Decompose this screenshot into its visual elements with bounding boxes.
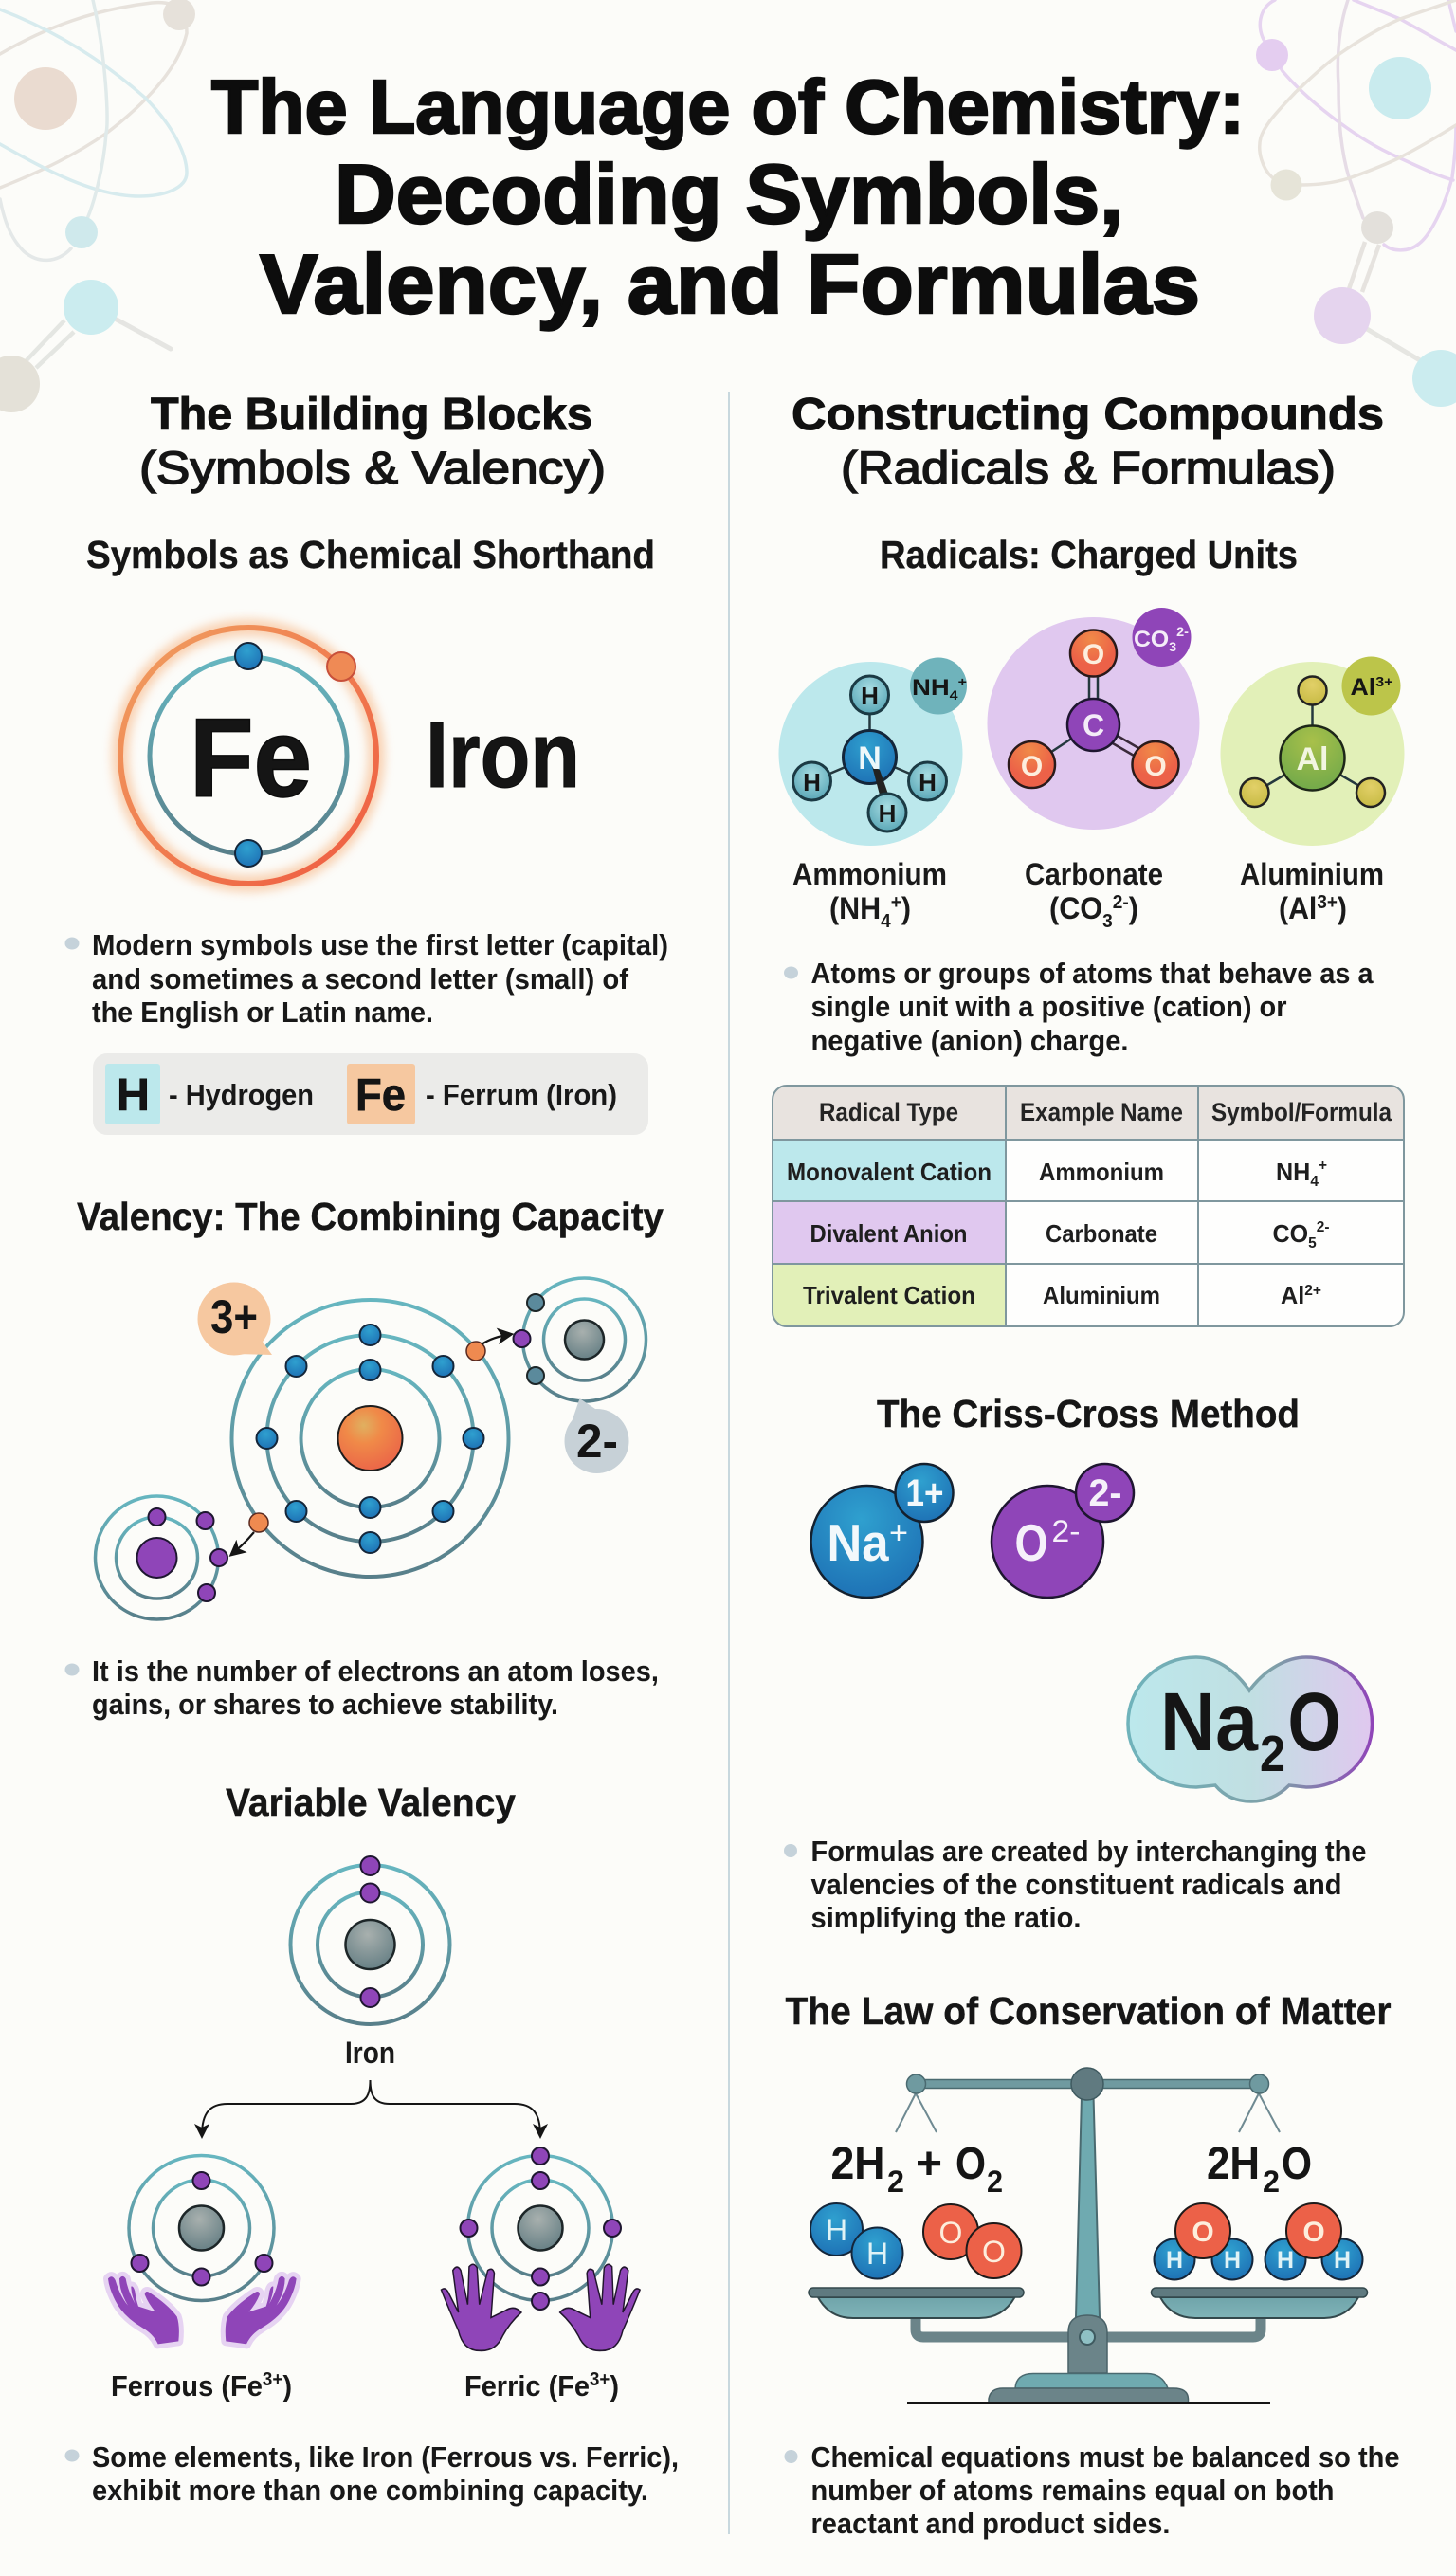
- equation: reactants: 2: [887, 2165, 904, 2199]
- icon: aluminium ion: Al: [1350, 674, 1374, 701]
- icon: oxygen molecule: O: [982, 2235, 1006, 2269]
- bullet: valency definition: gains, or shares to achieve stability.: [92, 1688, 558, 1721]
- icon: water molecule two: [1265, 2203, 1363, 2279]
- icon: Na2O compound: Na: [1160, 1676, 1259, 1768]
- heading: variable valency: Variable Valency: [226, 1781, 516, 1824]
- title: [211, 64, 1245, 331]
- badge: 2-: [565, 1398, 629, 1473]
- heading: radicals: Radicals: Charged Units: [880, 533, 1298, 576]
- left column heading: [139, 390, 606, 494]
- table: radical types: Aluminium: [1043, 1281, 1160, 1309]
- bullet: valency definition: It is the number of electrons an atom loses,: [92, 1654, 659, 1688]
- icon: oxide ion: 2-: [1052, 1514, 1081, 1548]
- bullet: balanced equations: number of atoms remains equal on both: [811, 2474, 1335, 2507]
- table: radical types: 5: [1308, 1235, 1317, 1251]
- equation: product: 2: [1263, 2165, 1280, 2199]
- left column heading: The Building Blocks: [151, 390, 592, 440]
- bullet: modern symbols: [64, 928, 668, 1029]
- bullet: formulas: simplifying the ratio.: [811, 1901, 1081, 1934]
- right pan: [1151, 2288, 1367, 2318]
- diagram: balance scale: [809, 2068, 1367, 2403]
- arrow: branching to ferrous and ferric: [202, 2080, 540, 2135]
- bullet: valency definition: [64, 1654, 659, 1721]
- bullet: formulas: Formulas are created by interchanging the: [811, 1835, 1367, 1868]
- icon: ammonium molecule: NH: [912, 675, 945, 701]
- table: radical types: 2-: [1317, 1219, 1329, 1235]
- equation: product: [1207, 2139, 1312, 2199]
- labels: radical names: 3+: [1317, 892, 1338, 913]
- icon: sodium ion: Na: [827, 1513, 889, 1572]
- table: radical types: Al: [1281, 1281, 1305, 1309]
- icon: aluminium ion: Al: [1297, 741, 1329, 777]
- equation: product: O: [1282, 2139, 1312, 2189]
- label: ferric: Ferric (Fe: [464, 2369, 598, 2402]
- table: radical types: CO: [1272, 1219, 1310, 1248]
- icon: sodium ion: +: [889, 1515, 908, 1551]
- labels: radical names: ): [1129, 891, 1138, 925]
- symbol key: hydrogen and ferrum: - Hydrogen: [169, 1078, 314, 1111]
- labels: radical names: [792, 857, 1384, 932]
- equation: reactants: 2H: [830, 2139, 885, 2189]
- icon: ammonium molecule: H: [919, 768, 937, 796]
- bullet: radicals definition: [784, 957, 1374, 1057]
- diagram: ferrous atom: [129, 2156, 274, 2300]
- right column heading: (Radicals & Formulas): [841, 444, 1336, 494]
- bullet: variable valency: Some elements, like Iron (Ferrous vs. Ferric),: [92, 2440, 679, 2474]
- icon: ammonium molecule: H: [861, 682, 879, 710]
- icon: Fe atom: [120, 628, 376, 884]
- icon: oxide ion: 2-: [1088, 1472, 1122, 1514]
- table: radical types: Radical Type: [819, 1098, 958, 1126]
- icon: ammonium molecule: H: [879, 799, 896, 828]
- heading: valency: Valency: The Combining Capacity: [77, 1195, 664, 1238]
- table: radical types: Monovalent Cation: [787, 1158, 992, 1186]
- left pan: [809, 2288, 1024, 2318]
- bullet: radicals definition: negative (anion) charge.: [811, 1024, 1128, 1057]
- icon: water molecule one: H: [1166, 2247, 1183, 2274]
- table: radical types: Divalent Anion: [810, 1219, 967, 1248]
- labels: radical names: (Al: [1279, 891, 1320, 925]
- icon: hydrogen molecule: H: [826, 2213, 847, 2247]
- icon: water molecule two: H: [1277, 2247, 1294, 2274]
- bullet: modern symbols: and sometimes a second letter (small) of: [92, 962, 629, 996]
- symbol key: hydrogen and ferrum: H: [117, 1070, 150, 1121]
- table: radical types: Example Name: [1020, 1098, 1183, 1126]
- icon: ammonium molecule: N: [858, 740, 882, 776]
- bullet: modern symbols: the English or Latin name.: [92, 996, 433, 1029]
- icon: carbonate molecule: 2-: [1176, 624, 1189, 639]
- equation: reactants: 2: [987, 2165, 1003, 2199]
- icon: carbonate molecule: 3: [1169, 639, 1176, 654]
- bullet: variable valency: exhibit more than one combining capacity.: [92, 2474, 648, 2507]
- icon: water molecule two: H: [1334, 2247, 1351, 2274]
- icon: ammonium molecule: +: [958, 674, 967, 689]
- icon: Fe atom: Fe: [190, 696, 312, 821]
- icon: oxygen molecule: O: [939, 2216, 962, 2250]
- table: radical types: 2+: [1304, 1283, 1321, 1299]
- bullet: balanced equations: [785, 2440, 1399, 2540]
- equation: reactants: O: [956, 2139, 986, 2189]
- symbol key: hydrogen and ferrum: Fe: [355, 1070, 406, 1121]
- symbol key: hydrogen and ferrum: [93, 1053, 648, 1135]
- heading: symbols as chemical shorthand: Symbols as Chemical Shorthand: [86, 533, 655, 576]
- bullet: modern symbols: Modern symbols use the first letter (capital): [92, 928, 668, 961]
- table: radical types: NH: [1276, 1158, 1312, 1186]
- icon: oxide ion: O: [1014, 1513, 1048, 1572]
- icon: water molecule one: O: [1192, 2217, 1214, 2248]
- labels: radical names: Aluminium: [1240, 857, 1384, 891]
- icon: Na2O compound: 2: [1260, 1726, 1285, 1782]
- table: radical types: +: [1319, 1158, 1327, 1174]
- right column heading: Constructing Compounds: [792, 390, 1384, 440]
- equation: reactants: +: [916, 2139, 942, 2189]
- labels: radical names: 4: [881, 911, 892, 932]
- equation: reactants: [830, 2139, 1003, 2199]
- table: radical types: [773, 1086, 1404, 1326]
- symbol key: hydrogen and ferrum: - Ferrum (Iron): [426, 1078, 617, 1111]
- diagram: ferric atom: [461, 2147, 621, 2310]
- table: radical types: Ammonium: [1039, 1158, 1164, 1186]
- badge: 2-: 2-: [576, 1415, 618, 1468]
- icon: oxide ion: [992, 1464, 1134, 1598]
- table: radical types: 4: [1310, 1174, 1319, 1190]
- table: radical types: Symbol/Formula: [1211, 1098, 1392, 1126]
- labels: radical names: ): [1338, 891, 1347, 925]
- labels: radical names: (NH: [829, 891, 883, 925]
- diagram: iron atom: [290, 1856, 449, 2024]
- left column heading: (Symbols & Valency): [139, 444, 606, 494]
- label: ferrous: Ferrous (Fe: [111, 2369, 273, 2402]
- badge: 3+: 3+: [210, 1290, 258, 1343]
- icon: ammonium molecule: [779, 658, 967, 846]
- labels: radical names: ): [901, 891, 911, 925]
- right column heading: [792, 390, 1384, 494]
- label: ferric: 3+: [590, 2369, 610, 2390]
- panel: left column, the building blocks: [64, 390, 679, 2507]
- icon: carbonate molecule: O: [1083, 639, 1104, 670]
- bullet: radicals definition: Atoms or groups of atoms that behave as a: [811, 957, 1374, 990]
- labels: radical names: 2-: [1113, 892, 1129, 913]
- table: radical types: Trivalent Cation: [803, 1281, 975, 1309]
- label: Iron: Iron: [426, 703, 580, 807]
- icon: aluminium ion: [1221, 656, 1405, 846]
- arrow: electron to top right atom: [482, 1335, 510, 1344]
- icon: carbonate molecule: O: [1021, 751, 1043, 782]
- bullet: formulas: [784, 1835, 1367, 1934]
- icon: hydrogen molecule: H: [866, 2237, 888, 2271]
- labels: radical names: +: [891, 892, 901, 913]
- icon: sodium ion: [811, 1464, 954, 1598]
- title: Decoding Symbols,: [335, 147, 1123, 241]
- bottom left atom: [95, 1496, 228, 1619]
- arrow: electron to bottom left atom: [232, 1532, 254, 1554]
- label: Iron: Iron: [345, 2036, 395, 2070]
- icon: carbonate molecule: [988, 608, 1200, 830]
- decorative atoms: top right: [1256, 0, 1456, 407]
- equation: product: 2H: [1207, 2139, 1260, 2189]
- bullet: variable valency: [64, 2440, 679, 2507]
- icon: sodium ion: 1+: [906, 1472, 944, 1514]
- diagram: electron transfer between atoms: [95, 1278, 646, 1619]
- title: The Language of Chemistry:: [211, 64, 1245, 149]
- icon: cupped hands: [108, 2276, 297, 2344]
- bullet: balanced equations: Chemical equations must be balanced so the: [811, 2440, 1399, 2474]
- label: ferrous: ): [282, 2369, 292, 2402]
- central atom: [231, 1300, 508, 1577]
- icon: carbonate molecule: CO: [1134, 627, 1168, 652]
- panel: right column, constructing compounds: [773, 390, 1405, 2540]
- column divider: [728, 392, 730, 2534]
- icon: carbonate molecule: C: [1083, 708, 1104, 742]
- title: Valency, and Formulas: [260, 237, 1200, 331]
- badge: 3+: [197, 1282, 272, 1356]
- top right atom: [514, 1278, 646, 1401]
- icon: ammonium molecule: H: [803, 768, 821, 796]
- icon: water molecule two: O: [1302, 2217, 1325, 2248]
- table: radical types: Carbonate: [1046, 1219, 1157, 1248]
- labels: radical names: (CO: [1049, 891, 1105, 925]
- icon: water molecule one: H: [1224, 2247, 1241, 2274]
- decorative atoms: top left: [0, 0, 195, 412]
- label: ferric: ): [610, 2369, 619, 2402]
- heading: law of conservation: The Law of Conservation of Matter: [785, 1989, 1392, 2033]
- icon: Na2O compound: O: [1287, 1676, 1340, 1768]
- labels: radical names: Ammonium: [792, 857, 947, 891]
- bullet: formulas: valencies of the constituent radicals and: [811, 1868, 1342, 1901]
- icon: Na2O compound: [1128, 1657, 1373, 1801]
- icon: oxygen molecule: [923, 2204, 1022, 2278]
- bullet: balanced equations: reactant and product sides.: [811, 2507, 1170, 2540]
- icon: ammonium molecule: 4: [950, 687, 958, 703]
- bullet: radicals definition: single unit with a positive (cation) or: [811, 990, 1287, 1023]
- label: ferrous: 3+: [263, 2369, 282, 2390]
- heading: criss-cross method: The Criss-Cross Method: [877, 1392, 1300, 1435]
- icon: hydrogen molecule: [810, 2203, 902, 2279]
- labels: radical names: Carbonate: [1025, 857, 1163, 891]
- labels: radical names: 3: [1102, 911, 1113, 932]
- icon: water molecule one: [1155, 2203, 1253, 2279]
- icon: aluminium ion: 3+: [1375, 674, 1393, 690]
- icon: carbonate molecule: O: [1144, 751, 1167, 782]
- icon: open hands: [441, 2264, 640, 2350]
